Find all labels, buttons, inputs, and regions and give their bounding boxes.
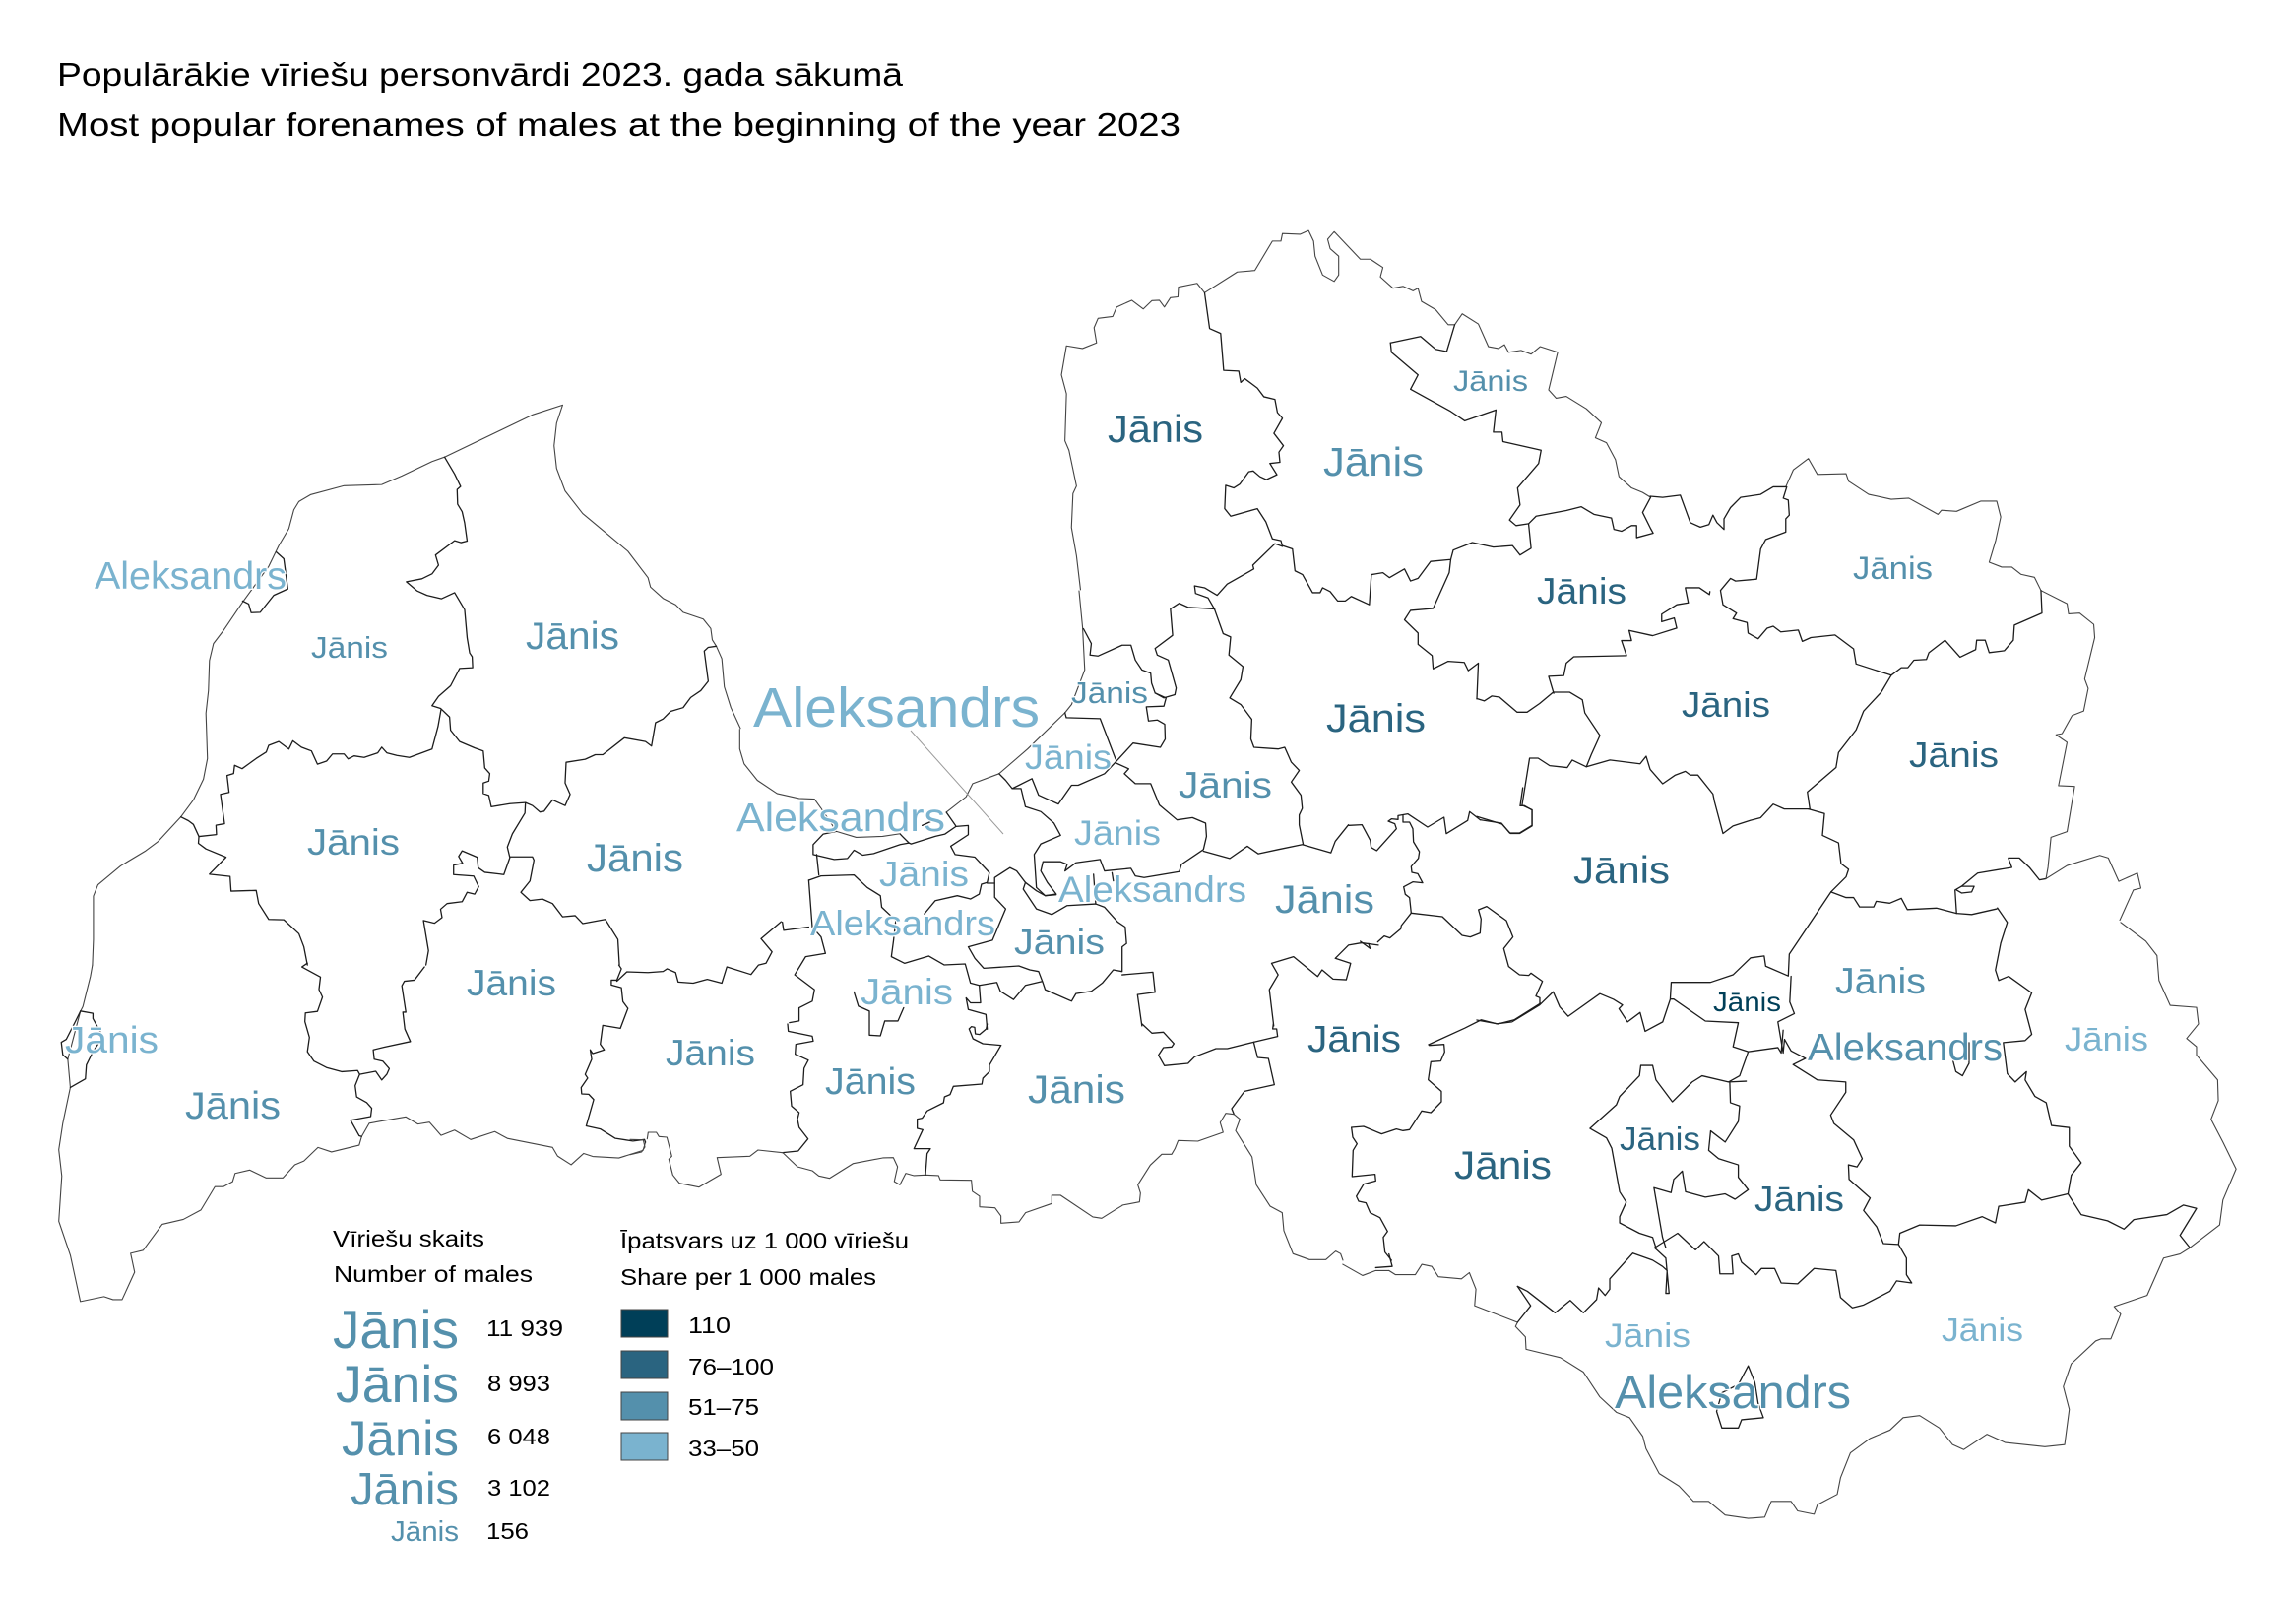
label: Jānis Saulkrasti: Jānis <box>1071 675 1148 710</box>
map: south-central border <box>630 1024 1122 1223</box>
label: Jānis Ludza: Jānis <box>2065 1021 2148 1058</box>
label: Jānis Aizkraukle: Jānis <box>1307 1019 1401 1060</box>
legend size sample: 8 993: 8 993 <box>487 1371 550 1396</box>
label: Jānis Gulbene: Jānis <box>1682 684 1770 725</box>
legend size sample: 3 102 <box>351 1463 550 1514</box>
legend swatch: 110: 110 <box>688 1312 731 1338</box>
legend size sample: 3 102: Jānis <box>351 1463 459 1514</box>
label: Aleksandrs Olaine: Aleksandrs <box>810 903 995 943</box>
label: Jānis Ādaži: Jānis <box>1025 738 1112 777</box>
label: Jānis Ropaži: Jānis <box>1074 814 1161 853</box>
label: Jānis Ventspils novads: Jānis <box>311 630 388 665</box>
label: Jānis Saldus: Jānis <box>467 963 556 1003</box>
label: Jānis Dienvidkurzeme: Jānis <box>185 1085 281 1127</box>
legend: number of males <box>333 1226 563 1548</box>
map: north-eastern Latvia boundaries (Alūksne, Balvi, Gulbene, Madona) <box>1477 459 2140 1031</box>
legend heading: share <box>620 1228 909 1290</box>
label: Jānis Sigulda: Jānis <box>1179 765 1272 805</box>
label: Jānis Alūksne: Jānis <box>1853 550 1933 586</box>
legend size sample: 156: 156 <box>486 1518 529 1544</box>
label: Jānis Valmiera novads: Jānis <box>1323 439 1424 484</box>
label: Jānis Smiltene: Jānis <box>1537 571 1626 611</box>
legend size sample: 11 939: 11 939 <box>486 1315 563 1341</box>
legend swatch: 110 <box>621 1310 731 1338</box>
legend size sample: 6 048: Jānis <box>342 1411 459 1466</box>
label: Jānis Rēzekne novads: Jānis <box>1835 961 1926 1001</box>
legend swatch: 76–100: 76–100 <box>688 1354 774 1379</box>
label: Jānis Kuldīga: Jānis <box>307 822 400 863</box>
legend size sample: 8 993: Jānis <box>336 1356 459 1414</box>
legend heading: number of males <box>333 1226 533 1287</box>
legend size sample: 6 048: 6 048 <box>487 1424 550 1449</box>
legend heading: share: Īpatsvars uz 1 000 vīriešu <box>620 1228 909 1253</box>
legend swatch: 51–75: 51–75 <box>688 1394 759 1420</box>
legend: share per 1 000 males <box>620 1228 909 1461</box>
legend swatch: 51–75 <box>621 1392 759 1420</box>
title: Most popular forenames of males at the beginning of the year 2023 <box>57 107 1180 144</box>
label: Jānis Jelgava city: Jānis <box>861 972 953 1012</box>
label: Aleksandrs Rēzekne city: Aleksandrs <box>1808 1027 2003 1069</box>
label: Jānis Jelgava novads: Jānis <box>825 1061 916 1103</box>
label: Jānis Mārupe: Jānis <box>879 854 969 894</box>
leader line: Rīga label <box>911 731 1003 834</box>
legend size sample: 11 939 <box>333 1299 563 1360</box>
label: Jānis Limbaži: Jānis <box>1108 409 1203 451</box>
map: south-eastern Latvia boundaries (Latgale) <box>1343 908 2236 1518</box>
label: Jānis Liepāja: Jānis <box>65 1020 159 1061</box>
legend size sample: 3 102: 3 102 <box>487 1475 550 1501</box>
map: western Latvia boundaries (Kurzeme south) <box>59 922 781 1302</box>
label: Jānis Cēsis: Jānis <box>1326 697 1426 740</box>
map: western Latvia boundaries (Kurzeme north) <box>93 405 740 965</box>
label: Jānis Ogre: Jānis <box>1275 878 1374 922</box>
legend swatch: 76–100 <box>621 1351 774 1379</box>
label: Jānis Talsi: Jānis <box>526 615 619 658</box>
map: Ogre and Madona junction boundaries <box>1349 788 1543 1003</box>
label: Jānis Madona: Jānis <box>1573 850 1670 892</box>
title <box>57 57 1180 144</box>
label: Jānis Ķekava: Jānis <box>1014 922 1105 962</box>
legend swatch: 33–50: 33–50 <box>688 1436 759 1461</box>
legend size sample: 8 993 <box>336 1356 550 1414</box>
label: Aleksandrs Rīga: Aleksandrs <box>753 676 1040 739</box>
legend heading: number of males: Vīriešu skaits <box>333 1226 484 1251</box>
label: Jānis Preiļi: Jānis <box>1754 1179 1844 1219</box>
label: Jānis Balvi: Jānis <box>1909 735 1999 775</box>
legend swatch: 33–50 <box>621 1433 759 1461</box>
label: Jānis Krāslava: Jānis <box>1942 1312 2023 1348</box>
label: Jānis Līvāni: Jānis <box>1620 1120 1700 1157</box>
label: Aleksandrs Salaspils: Aleksandrs <box>1058 869 1246 910</box>
legend heading: number of males: Number of males <box>334 1261 533 1287</box>
title: Populārākie vīriešu personvārdi 2023. gada sākumā <box>57 57 903 94</box>
label: Aleksandrs Jūrmala: Aleksandrs <box>736 795 945 840</box>
label: Jānis Varakļāni: Jānis <box>1713 987 1781 1017</box>
label: Jānis Valka: Jānis <box>1453 365 1528 398</box>
label: Jānis Dobele: Jānis <box>666 1033 755 1073</box>
label: Jānis Tukums: Jānis <box>587 837 683 880</box>
legend size sample: 156 <box>391 1516 529 1548</box>
legend size sample: 11 939: Jānis <box>333 1299 459 1360</box>
label: Jānis Jēkabpils: Jānis <box>1454 1144 1552 1187</box>
legend heading: share: Share per 1 000 males <box>620 1264 876 1290</box>
label: Jānis Bauska: Jānis <box>1028 1068 1125 1112</box>
map: central Latvia boundaries (Riga area) <box>739 591 1378 1036</box>
legend size sample: 156: Jānis <box>391 1516 459 1548</box>
map: south-central boundaries (Aizkraukle) <box>1122 1024 1444 1260</box>
label: Jānis Augšdaugava: Jānis <box>1605 1317 1690 1355</box>
label: Aleksandrs Daugavpils: Aleksandrs <box>1615 1366 1851 1418</box>
map: northern Latvia boundaries (Vidzeme) <box>1061 230 1710 699</box>
map labels <box>65 365 2148 1418</box>
label: Aleksandrs Ventspils: Aleksandrs <box>95 555 287 598</box>
legend size sample: 6 048 <box>342 1411 550 1466</box>
